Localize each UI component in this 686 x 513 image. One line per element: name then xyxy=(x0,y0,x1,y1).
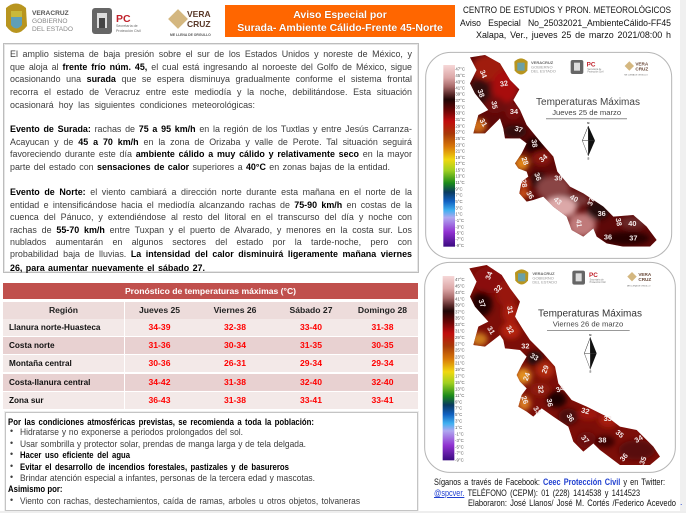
partner logos: ME LLENA DE ORGULLO xyxy=(627,284,651,287)
temperature colour scale: -5°C xyxy=(455,444,464,449)
header logos: DEL ESTADO xyxy=(32,26,73,33)
row: Llanura norte-Huasteca: 31-38 xyxy=(372,322,393,332)
row: Montaña central: 29-34 xyxy=(372,358,393,368)
table title xyxy=(3,283,418,299)
compass rose: N xyxy=(587,121,589,125)
temperature colour scale: -7°C xyxy=(455,237,464,242)
compass rose: S xyxy=(587,157,589,161)
map of Veracruz temperatures: 32 xyxy=(504,324,516,335)
temperature colour scale: 15°C xyxy=(455,167,465,172)
partner logos: CRUZ xyxy=(635,66,648,71)
temperature colour scale: 15°C xyxy=(455,380,465,385)
header logos: ME LLENA DE ORGULLO xyxy=(170,33,211,37)
panel: forecast text xyxy=(3,43,419,273)
map of Veracruz temperatures: 32 xyxy=(492,283,504,295)
map of Veracruz temperatures: 34 xyxy=(483,269,495,281)
temperature colour scale: 13°C xyxy=(455,386,465,391)
row: Montaña central: Montaña central xyxy=(9,359,72,368)
panel: recommendations: • xyxy=(10,426,13,437)
row: Montaña central xyxy=(3,355,418,372)
temperature colour scale: 9°C xyxy=(455,186,463,191)
compass rose: N xyxy=(589,333,591,337)
partner logos: Secretaría de xyxy=(587,68,602,71)
map title: Temperaturas Máximas xyxy=(538,308,642,319)
map of Veracruz temperatures: 35 xyxy=(614,428,626,440)
temperature colour scale: 39°C xyxy=(455,303,465,308)
panel: forecast text: entidad e intensificándose hacia el mediodía alcanzando rachas de 75-90 km/h en costas de la xyxy=(10,200,412,211)
panel: forecast text: que aloja al frente frío núm. 45, el cual está ingresando al noroeste del Golfo de México, sigue xyxy=(10,62,412,73)
table header row: Región xyxy=(49,305,78,315)
map of Veracruz temperatures: 40 xyxy=(628,219,636,228)
temperature colour scale: 31°C xyxy=(455,329,465,334)
temperature colour scale: 43°C xyxy=(455,290,465,295)
temperature colour scale: 1°C xyxy=(455,425,462,430)
map of Veracruz temperatures: 36 xyxy=(618,451,630,463)
temperature colour scale: -5°C xyxy=(455,230,464,235)
temperature colour scale: 19°C xyxy=(455,155,465,160)
temperature colour scale: 21°C xyxy=(455,149,465,154)
map of Veracruz temperatures: 36 xyxy=(598,209,606,218)
partner logos: Protección Civil xyxy=(590,281,606,284)
row: Costa-llanura central: 34-42 xyxy=(148,377,170,387)
map of Veracruz temperatures: 33 xyxy=(604,414,612,423)
panel: forecast text: rachas de 55-70 km/h entre Tuxpan y el puerto de Alvarado, y menores en la costa sur. Los xyxy=(10,225,412,236)
temperature colour scale: 23°C xyxy=(455,142,465,147)
map title xyxy=(536,97,640,119)
row: Costa-llanura central: Costa-llanura central xyxy=(9,378,90,387)
map of Veracruz temperatures: 32 xyxy=(521,341,529,350)
row: Zona sur xyxy=(3,392,418,409)
map panel: Friday 26 March xyxy=(424,262,676,473)
panel: recommendations: • xyxy=(10,495,13,506)
table header row: Jueves 25 xyxy=(139,305,180,315)
row: Llanura norte-Huasteca: Llanura norte-Huasteca xyxy=(9,323,100,332)
header logos: VERA xyxy=(187,9,211,19)
table header row xyxy=(3,302,418,319)
issuing centre heading: Aviso Especial No_25032021_AmbienteCálido-FF45 xyxy=(460,18,671,29)
column dividers xyxy=(124,302,125,409)
temperature colour scale: -1°C xyxy=(455,431,464,436)
map of Veracruz temperatures: 36 xyxy=(565,412,576,423)
temperature colour scale: 27°C xyxy=(455,130,465,135)
partner logos: GOBIERNO xyxy=(532,275,554,280)
map title: Temperaturas Máximas xyxy=(536,97,640,108)
row: Zona sur: 31-38 xyxy=(224,395,246,405)
map of Veracruz temperatures: 28 xyxy=(519,179,529,188)
contact footer: Síganos a través de Facebook: Ceec Protección Civil y en Twitter: xyxy=(434,477,665,487)
map of Veracruz temperatures: 34 xyxy=(510,107,519,116)
map title: Viernes 26 de marzo xyxy=(553,320,623,329)
row: Costa norte: Costa norte xyxy=(9,341,54,350)
temperature colour scale: -3°C xyxy=(455,438,464,443)
map title: Jueves 25 de marzo xyxy=(552,108,621,117)
temperature colour scale: 29°C xyxy=(455,335,465,340)
header logos: Secretaría de xyxy=(116,24,138,28)
panel: forecast text: cuenca del Pánuco, y extendiéndose al resto del litoral en el transcurso del día y noche con xyxy=(10,212,412,223)
panel: recommendations: • xyxy=(10,472,13,483)
partner logos xyxy=(515,269,652,287)
temperature colour scale: 21°C xyxy=(455,361,465,366)
map title xyxy=(538,308,642,331)
panel: recommendations: • xyxy=(10,461,13,472)
temperature colour scale: 17°C xyxy=(455,374,465,379)
temperature colour scale xyxy=(443,276,465,462)
panel: forecast text: favoreciendo durante este día ambiente cálido a muy cálido y relativamente seco en la mayor xyxy=(10,149,412,160)
map of Veracruz temperatures: 38 xyxy=(614,217,624,227)
temperature colour scale: 25°C xyxy=(455,136,465,141)
panel: recommendations: Por las condiciones atmosféricas previstas, se recomienda a toda la población: xyxy=(8,416,314,427)
map of Veracruz temperatures: 37 xyxy=(477,298,488,309)
contact footer: Elaboraron: José Llanos/ José M. Cortés /Federico Acevedo xyxy=(468,498,676,508)
panel: forecast text: recorra el estado de Veracruz entre este mediodía y la noche, debilitándose. Esta situación xyxy=(10,87,412,98)
compass rose xyxy=(582,121,595,161)
temperature colour scale: 37°C xyxy=(455,98,465,103)
map of Veracruz temperatures: 35 xyxy=(637,455,648,466)
partner logos: Secretaría de xyxy=(590,278,604,281)
panel: forecast text: nublados aumentarán en algunos sectores del estado por la tarde-noche, pero con xyxy=(10,237,412,248)
temperature colour scale: 33°C xyxy=(455,322,465,327)
map of Veracruz temperatures: 28 xyxy=(520,156,531,166)
table title: Pronóstico de temperaturas máximas (°C) xyxy=(125,286,296,296)
map of Veracruz temperatures: 34 xyxy=(555,383,566,394)
panel: recommendations: Usar sombrilla y protector solar, prendas de manga larga y de tela delgada. xyxy=(20,438,306,449)
temperature colour scale: 11°C xyxy=(455,180,465,185)
page margin strip xyxy=(680,0,686,513)
temperature colour scale: 1°C xyxy=(455,212,463,217)
map of Veracruz temperatures: 36 xyxy=(524,189,536,201)
temperature colour scale: -1°C xyxy=(455,218,464,223)
contact footer: @spcver. TELÉFONO (CEPM): 01 (228) 1414538 y 1414523 xyxy=(434,488,640,498)
map of Veracruz temperatures: 37 xyxy=(579,433,591,445)
temperature colour scale: 29°C xyxy=(455,123,465,128)
panel: recommendations: Viento con rachas, destechamientos, caída de ramas, arboles u otros objetos, tolvaneras xyxy=(20,495,360,506)
temperature colour scale: 31°C xyxy=(455,117,465,122)
row: Llanura norte-Huasteca: 32-38 xyxy=(224,322,246,332)
header logos: PC xyxy=(116,13,131,25)
issuing centre heading: CENTRO DE ESTUDIOS Y PRON. METEOROLÓGICOS xyxy=(463,5,671,16)
compass rose xyxy=(584,333,597,374)
partner logos: VERACRUZ xyxy=(531,60,554,65)
table header row: Sábado 27 xyxy=(290,305,332,315)
map of Veracruz temperatures: 32 xyxy=(580,405,590,416)
map of Veracruz temperatures: 36 xyxy=(545,398,555,407)
map of Veracruz temperatures: 26 xyxy=(519,395,530,405)
temperature colour scale: 17°C xyxy=(455,161,465,166)
panel frame xyxy=(426,52,672,258)
temperature colour scale: 19°C xyxy=(455,367,465,372)
panel: recommendations: Hacer uso eficiente del agua xyxy=(20,449,130,460)
partner logos: VERACRUZ xyxy=(532,271,555,276)
row: Zona sur: 36-43 xyxy=(148,395,170,405)
temperature colour scale: 13°C xyxy=(455,174,465,179)
map of Veracruz temperatures: 34 xyxy=(633,432,645,445)
table header row: Viernes 26 xyxy=(214,305,256,315)
temperature colour scale: -9°C xyxy=(455,243,464,248)
panel: recommendations: Brindar atención especial a infantes, personas de la tercera edad y mascotas. xyxy=(20,472,315,483)
partner logos: VERA xyxy=(635,61,649,66)
map of Veracruz temperatures: 36 xyxy=(532,171,543,182)
map of Veracruz temperatures: 43 xyxy=(552,195,564,207)
panel: recommendations: Hidratarse y no exponerse a periodos prolongados del sol. xyxy=(20,426,243,437)
partner logos: ME LLENA DE ORGULLO xyxy=(624,73,648,76)
temperature colour scale: 35°C xyxy=(455,104,465,109)
panel: recommendations: Asimismo por: xyxy=(8,483,62,494)
map panel: Thursday 25 March xyxy=(425,52,672,259)
temperature colour scale: 41°C xyxy=(455,86,465,91)
panel: forecast text: ocasionando una surada que se espera disminuya gradualmente conforme el sistema frontal xyxy=(10,74,412,85)
panel: forecast text: Evento de Surada: rachas de 75 a 95 km/h en la región de los Tuxtlas y entre Jesús Carranza- xyxy=(10,124,412,135)
row: Costa norte: 30-34 xyxy=(224,340,246,350)
header logos xyxy=(6,4,211,37)
map of Veracruz temperatures: 34 xyxy=(478,69,489,80)
partner logos: PC xyxy=(587,62,596,69)
row: Zona sur: Zona sur xyxy=(9,396,44,405)
contact footer: . xyxy=(680,497,682,507)
partner logos: Protección Civil xyxy=(587,71,604,74)
temperature colour scale: 27°C xyxy=(455,341,465,346)
partner logos: DEL ESTADO xyxy=(532,280,557,285)
bottom margin strip xyxy=(0,511,686,513)
partner logos: DEL ESTADO xyxy=(531,69,556,74)
temperature colour scale: -7°C xyxy=(455,451,464,456)
panel: recommendations: • xyxy=(10,438,13,449)
compass rose: S xyxy=(589,370,591,374)
map of Veracruz temperatures: 32 xyxy=(536,385,546,394)
header logos: CRUZ xyxy=(187,19,211,29)
panel frame xyxy=(425,262,675,472)
panel: recommendations xyxy=(5,412,418,511)
panel: forecast text: probabilidad baja de lluvias. La intensidad del calor disminuirá ligeramente mañana viernes xyxy=(10,249,412,260)
row: Zona sur: 33-41 xyxy=(300,395,322,405)
temperature colour scale: 3°C xyxy=(455,419,462,424)
temperature colour scale: 35°C xyxy=(455,316,465,321)
temperature colour scale: 7°C xyxy=(455,406,462,411)
temperature colour scale: 9°C xyxy=(455,399,462,404)
temperature colour scale: 25°C xyxy=(455,348,465,353)
temperature colour scale: 33°C xyxy=(455,111,465,116)
row: Llanura norte-Huasteca: 34-39 xyxy=(148,322,170,332)
temperature colour scale xyxy=(443,65,465,248)
temperature colour scale: 45°C xyxy=(455,284,465,289)
map of Veracruz temperatures: 35 xyxy=(489,100,500,110)
row: Llanura norte-Huasteca xyxy=(3,319,418,336)
map of Veracruz temperatures: 36 xyxy=(604,232,612,241)
title banner xyxy=(225,5,455,37)
panel: forecast text: El amplio sistema de baja presión sobre el sur de los Estados Unidos y noreste de México, y xyxy=(10,49,412,60)
temperature colour scale: 45°C xyxy=(455,73,465,78)
map of Veracruz temperatures: 38 xyxy=(476,88,487,99)
temperature colour scale: 39°C xyxy=(455,92,465,97)
temperature colour scale: 23°C xyxy=(455,354,465,359)
map of Veracruz temperatures: 31 xyxy=(485,324,497,336)
row: Costa norte: 31-36 xyxy=(148,340,170,350)
temperature colour scale: -3°C xyxy=(455,224,464,229)
panel: forecast text: ocasionará hoy las siguientes condiciones meteorológicas: xyxy=(10,100,255,111)
temperature colour scale: 37°C xyxy=(455,309,465,314)
temperature colour scale: 11°C xyxy=(455,393,464,398)
title banner: Surada- Ambiente Cálido-Frente 45-Norte xyxy=(237,22,443,34)
panel: forecast text: Evento de Norte: el viento cambiará a dirección norte durante esta mañana en el norte de la xyxy=(10,187,412,198)
map of Veracruz temperatures xyxy=(467,260,667,468)
map of Veracruz temperatures: 37 xyxy=(629,233,637,242)
map of Veracruz temperatures: 33 xyxy=(529,351,540,363)
map of Veracruz temperatures: 40 xyxy=(568,192,580,204)
map of Veracruz temperatures: 29 xyxy=(540,364,551,375)
map of Veracruz temperatures: 31 xyxy=(478,117,489,128)
issuing centre heading xyxy=(460,5,671,41)
map of Veracruz temperatures: 39 xyxy=(554,174,562,183)
map of Veracruz temperatures: 37 xyxy=(514,124,524,135)
header logos: Protección Civil xyxy=(116,29,141,33)
temperature colour scale: -9°C xyxy=(455,457,464,462)
map of Veracruz temperatures: 24 xyxy=(521,370,532,382)
header logos: GOBIERNO xyxy=(32,18,68,25)
panel: forecast text: Acayucan y de 45 a 70 km/h en la zona de Orizaba y valle de Perote. Tal situación seguirá xyxy=(10,137,412,148)
map of Veracruz temperatures: 38 xyxy=(529,139,540,148)
temperature forecast table xyxy=(3,283,418,409)
row: Zona sur: 33-41 xyxy=(372,395,393,405)
row: Costa norte: 31-35 xyxy=(300,340,322,350)
map of Veracruz temperatures: 38 xyxy=(598,436,606,445)
row: Montaña central: 29-34 xyxy=(300,358,322,368)
row: Costa-llanura central: 32-40 xyxy=(300,377,322,387)
partner logos: PC xyxy=(589,272,598,279)
panel: recommendations: • xyxy=(10,449,13,460)
row: Costa-llanura central: 31-38 xyxy=(224,377,246,387)
row: Costa norte: 30-35 xyxy=(372,340,393,350)
map of Veracruz temperatures xyxy=(470,55,656,247)
table header row: Domingo 28 xyxy=(358,305,407,315)
header logos: VERACRUZ xyxy=(32,10,69,17)
map of Veracruz temperatures: 31 xyxy=(505,305,515,315)
panel: forecast text: 26, para aumentar nuevamente el sábado 27. xyxy=(10,263,205,274)
title banner: Aviso Especial por xyxy=(293,9,387,21)
temperature colour scale: 41°C xyxy=(455,296,465,301)
row: Montaña central: 30-36 xyxy=(148,358,170,368)
map of Veracruz temperatures: 33 xyxy=(531,404,543,416)
temperature colour scale: 7°C xyxy=(455,193,463,198)
partner logos xyxy=(514,58,649,76)
temperature colour scale: 5°C xyxy=(455,199,463,204)
temperature colour scale: 43°C xyxy=(455,79,465,84)
row: Montaña central: 26-31 xyxy=(224,358,246,368)
temperature colour scale: 47°C xyxy=(455,67,465,72)
row: Costa-llanura central xyxy=(3,374,418,391)
issuing centre heading: Xalapa, Ver., jueves 25 de marzo 2021/08:00 h xyxy=(476,30,671,41)
contact footer xyxy=(434,477,682,508)
panel: forecast text: parte del estado con sensaciones de calor superiores a 40°C en zonas bajas de la entidad. xyxy=(10,162,390,173)
partner logos: CRUZ xyxy=(638,277,651,282)
panel: recommendations: Evitar el desarrollo de incendios forestales, pastizales y de basureros xyxy=(20,461,289,472)
map of Veracruz temperatures: 37 xyxy=(585,196,596,207)
map of Veracruz temperatures: 32 xyxy=(499,78,509,89)
row: Costa norte xyxy=(3,337,418,354)
partner logos: VERA xyxy=(638,272,652,277)
map of Veracruz temperatures: 41 xyxy=(574,219,584,228)
map of Veracruz temperatures: 34 xyxy=(537,152,550,164)
row: Costa-llanura central: 32-40 xyxy=(372,377,393,387)
temperature colour scale: 47°C xyxy=(455,277,465,282)
temperature colour scale: 5°C xyxy=(455,412,462,417)
row: Llanura norte-Huasteca: 33-40 xyxy=(300,322,322,332)
temperature colour scale: 3°C xyxy=(455,205,463,210)
partner logos: GOBIERNO xyxy=(531,64,553,69)
